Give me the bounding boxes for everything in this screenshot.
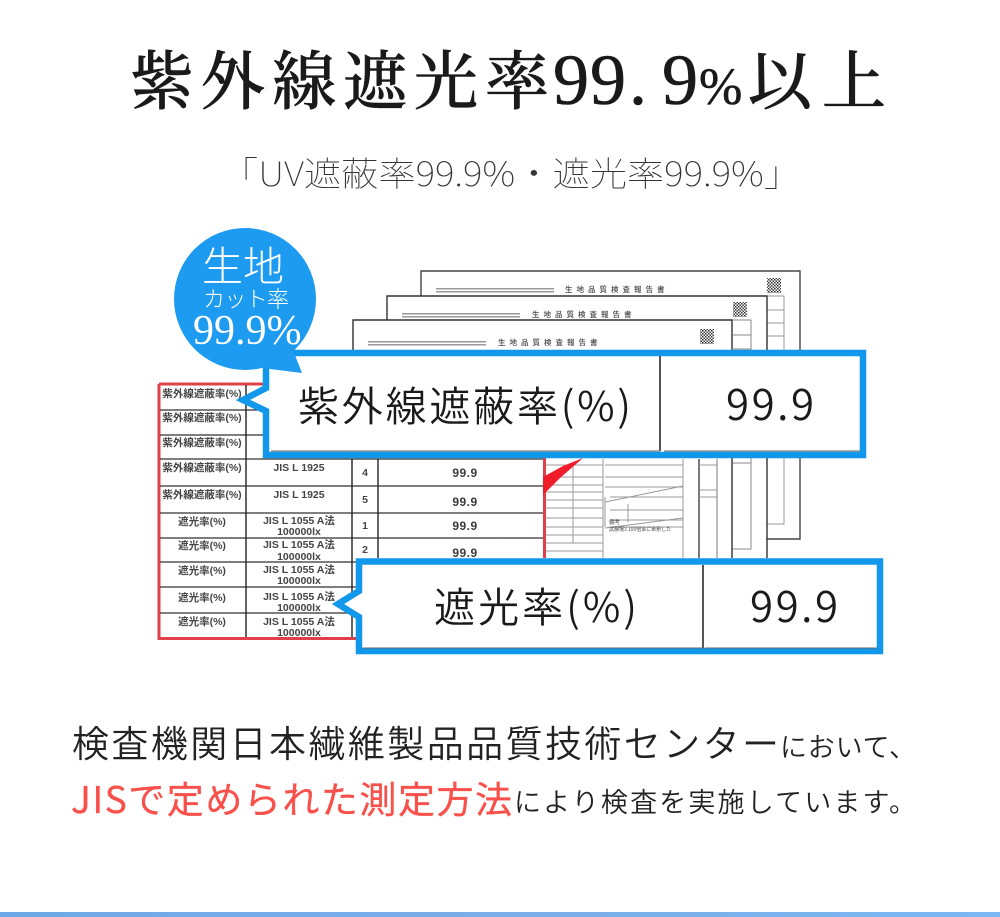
title xyxy=(130,31,886,123)
label: 紫外線遮蔽率(%) xyxy=(298,373,631,433)
report form detail xyxy=(544,459,717,558)
test report documents stack xyxy=(353,271,800,558)
red arrow mark xyxy=(543,458,583,495)
table rows xyxy=(162,387,478,639)
line 2: JISで定められた測定方法 xyxy=(71,770,512,824)
table rows: 遮光率(%) xyxy=(178,615,226,628)
line 1: 検査機関日本繊維製品品質技術センター xyxy=(72,714,779,768)
title: 以上 xyxy=(748,31,886,123)
table rows: 遮光率(%) xyxy=(178,591,226,604)
value: 99.9 xyxy=(726,372,814,433)
table rows: JIS L 1055 A法 xyxy=(263,514,335,527)
results table with red outline xyxy=(159,384,583,639)
table rows: 4 xyxy=(362,467,368,479)
callout: UV shielding rate xyxy=(243,353,863,455)
table rows: 1 xyxy=(362,520,368,532)
badge: fabric cut rate xyxy=(174,228,316,373)
report form detail: 備考 xyxy=(609,518,621,526)
table rows: 2 xyxy=(362,544,368,556)
table rows: 99.9 xyxy=(452,519,478,533)
table rows: 遮光率(%) xyxy=(178,539,226,552)
callout: light shielding rate xyxy=(338,562,880,651)
subtitle: 「UV遮蔽率99.9%・遮光率99.9%」 xyxy=(221,147,801,196)
badge: fabric cut rate: 99.9% xyxy=(193,308,302,354)
report sheet 1 xyxy=(421,271,800,539)
report sheet 2: 生地品質検査報告書 xyxy=(532,309,636,320)
report sheet 3: 生地品質検査報告書 xyxy=(498,337,602,348)
table rows: JIS L 1925 xyxy=(273,462,325,474)
report sheet 3 xyxy=(353,320,732,558)
table rows: 紫外線遮蔽率(%) xyxy=(162,488,242,501)
table rows: JIS L 1055 A法 xyxy=(263,590,335,603)
table rows: 紫外線遮蔽率(%) xyxy=(162,436,242,449)
bottom gradient bar xyxy=(0,912,1000,917)
value: 99.9 xyxy=(750,574,838,635)
table rows: JIS L 1055 A法 xyxy=(263,563,335,576)
table rows: 99.9 xyxy=(452,466,478,480)
table rows: 100000lx xyxy=(277,551,321,563)
line 1: において、 xyxy=(780,726,916,765)
description text xyxy=(71,714,916,824)
table rows: JIS L 1055 A法 xyxy=(263,615,335,628)
table rows: 100000lx xyxy=(277,627,321,639)
table rows: 100000lx xyxy=(277,575,321,587)
title: 99.9 xyxy=(553,40,698,120)
report sheet 1: 生地品質検査報告書 xyxy=(565,284,668,295)
table rows: 紫外線遮蔽率(%) xyxy=(162,461,242,474)
table rows: 99.9 xyxy=(452,546,478,560)
label: 遮光率(%) xyxy=(434,574,637,634)
table rows: 遮光率(%) xyxy=(178,515,226,528)
table rows: 5 xyxy=(362,494,368,506)
report form detail: 試験場3 100倍率に希釈した xyxy=(609,526,671,533)
table rows: 99.9 xyxy=(452,495,478,509)
table rows: JIS L 1055 A法 xyxy=(263,538,335,551)
line 2 xyxy=(71,770,916,824)
badge: fabric cut rate: カット率 xyxy=(203,282,289,314)
title: % xyxy=(699,59,742,116)
table rows: 100000lx xyxy=(277,526,321,538)
title: 紫外線遮光率 xyxy=(130,31,549,123)
line 2: により検査を実施しています。 xyxy=(514,781,916,820)
table rows: 遮光率(%) xyxy=(178,564,226,577)
table rows: 100000lx xyxy=(277,602,321,614)
table rows: JIS L 1925 xyxy=(273,489,325,501)
report sheet 2 xyxy=(387,296,767,558)
table rows: 紫外線遮蔽率(%) xyxy=(162,411,242,424)
badge: fabric cut rate: 生地 xyxy=(202,233,284,293)
table rows: 紫外線遮蔽率(%) xyxy=(162,387,242,400)
